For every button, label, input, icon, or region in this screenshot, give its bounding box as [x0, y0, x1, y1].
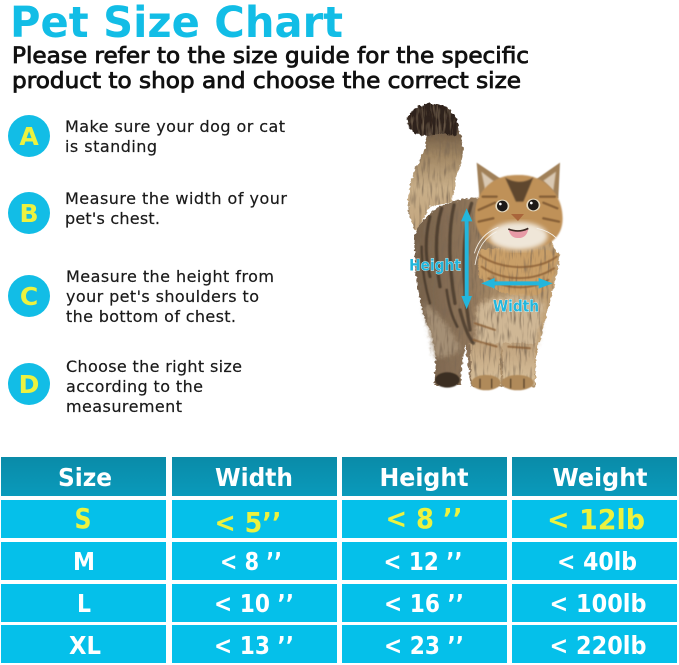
step A text	[65, 117, 285, 156]
icon: badge A: A	[19, 122, 39, 151]
header row: Height	[380, 463, 469, 492]
width arrow	[481, 278, 553, 289]
step A text: is standing	[65, 137, 157, 156]
row XL: < 23 ’’	[384, 631, 464, 660]
row L: < 16 ’’	[384, 589, 464, 618]
header row: Width	[215, 463, 293, 492]
row XL: < 220lb	[550, 631, 646, 660]
icon: badge B: B	[19, 199, 39, 228]
row L: < 10 ’’	[214, 589, 294, 618]
subtitle	[12, 44, 529, 94]
step C text	[66, 267, 274, 326]
step D	[8, 357, 242, 416]
step C text: the bottom of chest.	[66, 307, 236, 326]
header row: Weight	[552, 463, 648, 492]
step D text: measurement	[66, 397, 182, 416]
row XL	[1, 625, 677, 663]
icon: badge C: C	[20, 282, 38, 311]
icon: badge C	[8, 275, 50, 317]
cat stripes	[422, 203, 473, 343]
row S: < 8 ’’	[386, 502, 462, 535]
cat tail	[407, 103, 463, 232]
step C text: your pet's shoulders to	[66, 287, 259, 306]
height label: Height	[409, 255, 461, 274]
row S: < 5’’	[214, 506, 282, 539]
step B text	[65, 189, 287, 228]
step B text: Measure the width of your	[65, 189, 287, 208]
step D text: Choose the right size	[66, 357, 242, 376]
height arrow	[461, 208, 472, 309]
icon: badge D: D	[19, 370, 39, 399]
subtitle: Please refer to the size guide for the specific	[12, 44, 529, 69]
row L: L	[77, 589, 91, 618]
row S	[1, 500, 677, 539]
step D text	[66, 357, 242, 416]
row XL: XL	[69, 631, 101, 660]
subtitle: product to shop and choose the correct size	[12, 69, 521, 94]
cat nose and mouth	[508, 214, 528, 238]
row M: < 40lb	[557, 547, 637, 576]
icon: badge B	[8, 192, 50, 234]
row XL: < 13 ’’	[214, 631, 294, 660]
row S: S	[74, 502, 92, 535]
step A	[8, 115, 285, 157]
step D text: according to the	[66, 377, 203, 396]
header row	[1, 457, 677, 496]
size table	[1, 457, 677, 663]
step C text: Measure the height from	[66, 267, 274, 286]
row M: < 12 ’’	[384, 547, 462, 576]
row M: < 8 ’’	[220, 547, 282, 576]
cat illustration with measurement arrows	[407, 103, 563, 390]
icon: badge A	[8, 115, 50, 157]
row S: < 12lb	[547, 503, 645, 536]
step C	[8, 267, 274, 326]
row M: M	[73, 547, 95, 576]
width label: Width	[493, 297, 539, 316]
cat paws	[435, 372, 534, 390]
step B text: pet's chest.	[65, 209, 160, 228]
icon: badge D	[8, 363, 50, 405]
cat head	[474, 163, 563, 265]
step B	[8, 189, 287, 234]
row L	[1, 584, 677, 622]
cat eyes	[495, 199, 540, 212]
step A text: Make sure your dog or cat	[65, 117, 285, 136]
row L: < 100lb	[550, 589, 646, 618]
header row: Size	[58, 463, 112, 492]
cat body	[414, 197, 559, 387]
row M	[1, 542, 677, 580]
